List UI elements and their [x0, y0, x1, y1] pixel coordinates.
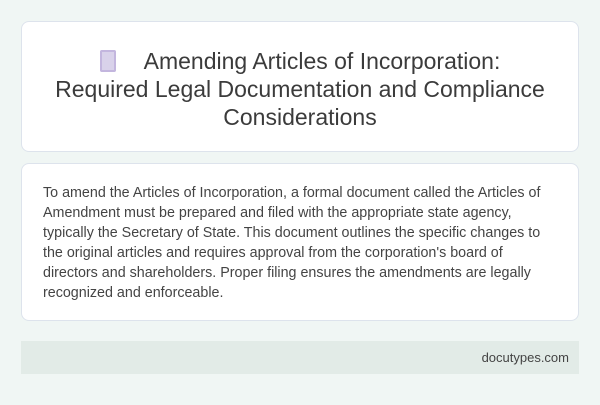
- title: Amending Articles of Incorporation:: [144, 48, 500, 74]
- title: [55, 48, 545, 130]
- title: Required Legal Documentation and Compliance: [55, 76, 545, 102]
- footer: [21, 341, 579, 374]
- footer text: docutypes.com: [482, 350, 569, 365]
- body text: To amend the Articles of Incorporation, a formal document called the Articles of Amendment must be prepared and filed with the appropriate state agency, typically the Secretary of State. This document outlines the specific changes to the original articles and requires approval from the corporation's board of directors and shareholders. Proper filing ensures the amendments are legally recognized and enforceable.: [43, 185, 540, 301]
- title: Considerations: [223, 104, 377, 130]
- icon: document: [100, 50, 116, 72]
- text card: [21, 163, 579, 321]
- title card: [21, 21, 579, 152]
